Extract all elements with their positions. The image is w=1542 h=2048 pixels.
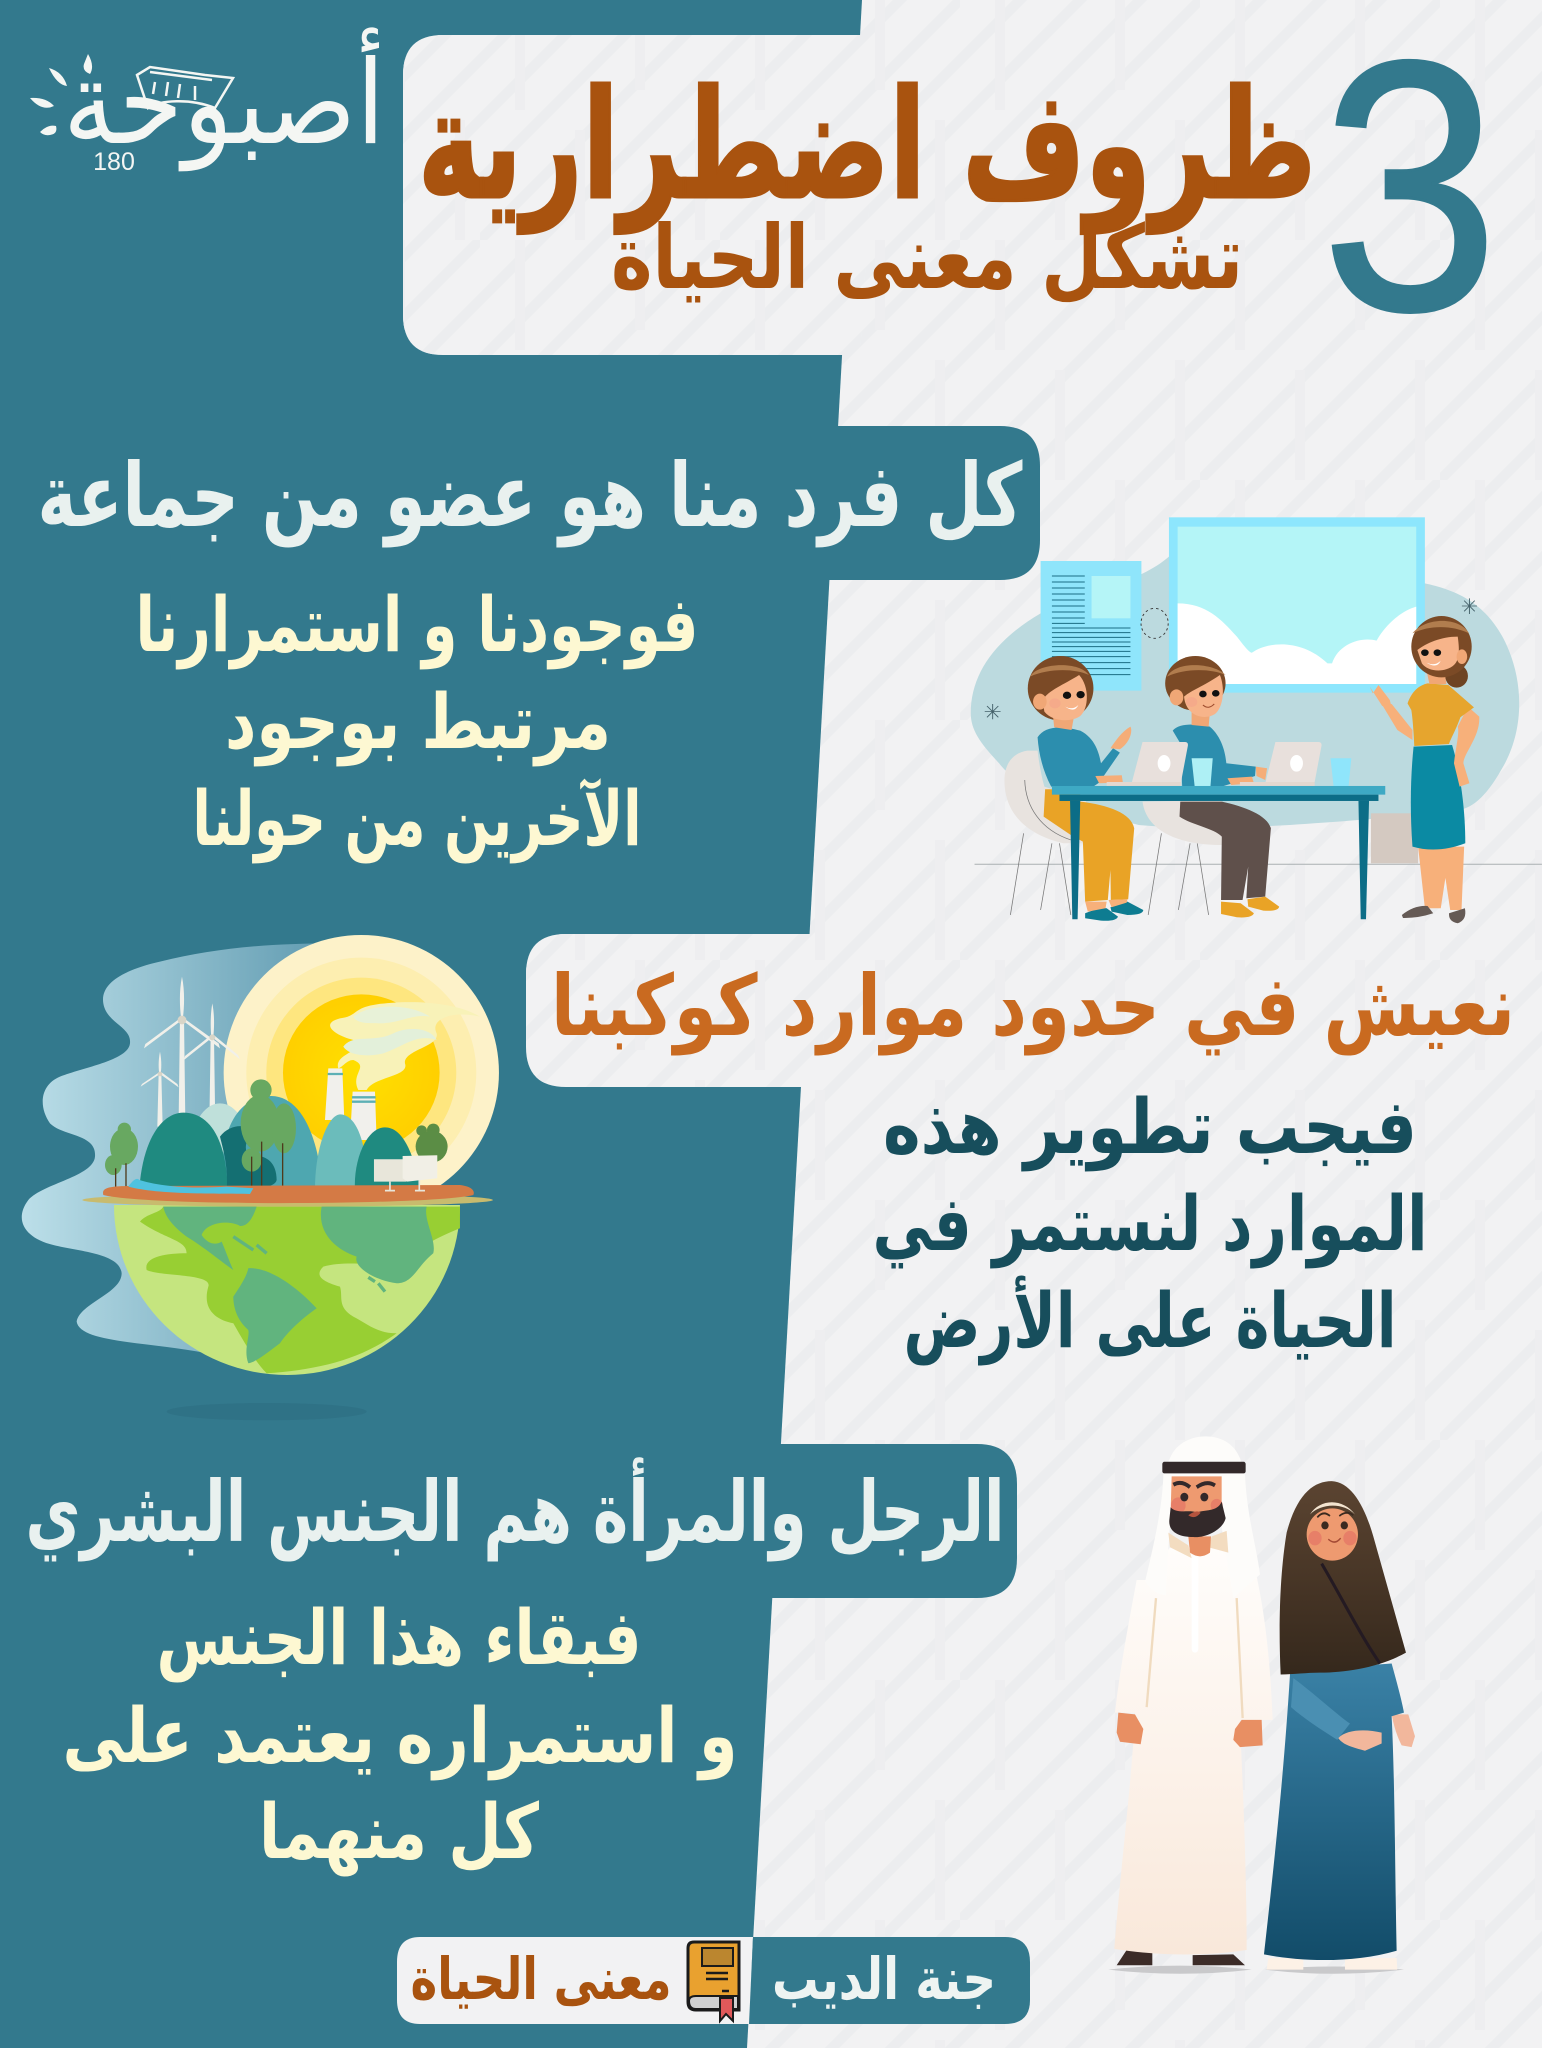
hair [1165,656,1226,711]
footer: light segment [397,1937,753,2024]
illustration: couple [1108,1436,1415,1974]
hair [1411,616,1472,677]
shirt [1173,725,1256,786]
mouth [1188,1511,1201,1517]
sparkles [985,598,1477,719]
right arm [1392,1714,1415,1747]
heading: section 3: الرجل والمرأة هم الجنس البشري [26,1457,1004,1562]
hand [1338,1730,1382,1751]
ground shadow [167,1403,367,1420]
hair highlight [1167,665,1226,677]
footer: book title: معنى الحياة [410,1945,672,2013]
solar panels [374,1155,437,1191]
heading: section 1: كل فرد منا هو عضو من جماعة [38,444,1023,548]
smile [1328,1538,1341,1542]
hair [1028,656,1093,721]
far hill [190,1103,250,1203]
eyes and mouth [1421,649,1429,656]
text: section 3 body: فبقاء هذا الجنس [156,1593,642,1682]
student 2 [1165,656,1279,917]
floor line [975,863,1542,866]
shoes [1085,902,1143,921]
agal [1162,1462,1246,1473]
illustration: planet [22,935,499,1420]
pill: section 3 heading background [760,1444,1017,1598]
hand [1110,727,1131,749]
table [1052,786,1385,919]
bun [1445,664,1468,688]
icon: book [688,1942,739,2021]
robe [1264,1664,1404,1960]
woman [1264,1481,1415,1970]
face [1042,675,1087,720]
neck shade [1168,1531,1228,1558]
legs [1044,789,1134,902]
footer bar [397,1937,1030,2024]
sun [224,935,499,1210]
beard [1169,1502,1226,1537]
hair highlight [1030,665,1089,677]
laptops and cups [1107,742,1351,786]
shoes [1267,1958,1397,1970]
shirt [1038,727,1120,787]
box [1371,813,1418,863]
left sleeve [1291,1678,1350,1740]
air blob [22,943,333,1353]
hair highlight [1412,621,1469,633]
blouse [1408,683,1474,746]
teacher [1370,616,1479,923]
face [1184,675,1223,717]
neck [1426,670,1446,684]
text: section 1 body [136,580,698,864]
footer: author: جنة الديب [772,1945,996,2013]
hills [139,1096,421,1190]
face [1307,1508,1358,1561]
hijab fold [1322,1564,1380,1664]
logo book icon [137,67,233,108]
arms [1382,704,1412,740]
pill: section 2 heading background [526,934,830,1087]
text: section 2 body: فيجب تطوير هذه [883,1082,1417,1172]
dashed circle [1141,608,1168,638]
eyes and mouth [1199,691,1207,697]
trees [105,1079,448,1190]
platform [82,1185,493,1207]
text: section 1 body: فوجودنا و استمرارنا [136,580,698,670]
sleeve seams [1147,1598,1243,1718]
globe [114,1205,460,1375]
eyes and brows [1321,1521,1329,1529]
neck [1192,707,1210,727]
shadows [1108,1966,1404,1974]
hands [1117,1713,1263,1747]
legs [1180,802,1271,900]
hijab [1280,1481,1406,1674]
cap band [1310,1502,1355,1515]
text: section 3 body: كل منهما [259,1787,540,1877]
chimneys [325,1068,377,1140]
logo sun rays [30,54,92,135]
text: section 3 body [62,1593,738,1877]
text: section 1 body: مرتبط بوجود [225,677,611,767]
logo number: 180 [93,148,135,176]
screen [1169,517,1425,693]
backdrop blob [971,557,1519,827]
ghutra [1145,1436,1260,1598]
cheeks [1308,1531,1322,1545]
logo [30,27,385,176]
neck [1053,713,1075,730]
smoke [330,1002,480,1090]
shoes [1117,1950,1245,1965]
face [1171,1476,1222,1535]
shoes [1221,897,1279,917]
legs [1418,847,1464,910]
eyes and brows [1180,1493,1188,1501]
footer: teal segment [749,1937,1030,2024]
water [128,1179,253,1194]
neck [1188,1536,1211,1556]
face [1417,637,1459,670]
man [1114,1436,1273,1965]
panel: title card [403,35,880,355]
text: section 3 body: و استمراره يعتمد على [62,1691,738,1781]
student 1 [1028,656,1143,921]
poster [1041,561,1141,691]
pill: section 1 heading background [800,426,1040,580]
subtitle: تشكل معنى الحياة [611,206,1243,309]
collar seam [1185,1560,1205,1649]
eyes and mouth [1063,692,1071,699]
text: section 1 body: الآخرين من حولنا [192,774,642,864]
cheeks [1171,1497,1186,1513]
shoes [1402,906,1465,923]
chairs [1004,751,1222,915]
text: section 2 body: الحياة على الأرض [904,1275,1396,1366]
logo word: أصبوحة [63,27,385,172]
wind turbines [141,977,240,1127]
skirt [1411,745,1465,850]
gown [1114,1547,1273,1954]
text: section 2 body [872,1082,1428,1366]
background: teal diagonal panel [0,0,862,2048]
illustration: classroom [971,517,1542,923]
hands [1227,767,1267,785]
